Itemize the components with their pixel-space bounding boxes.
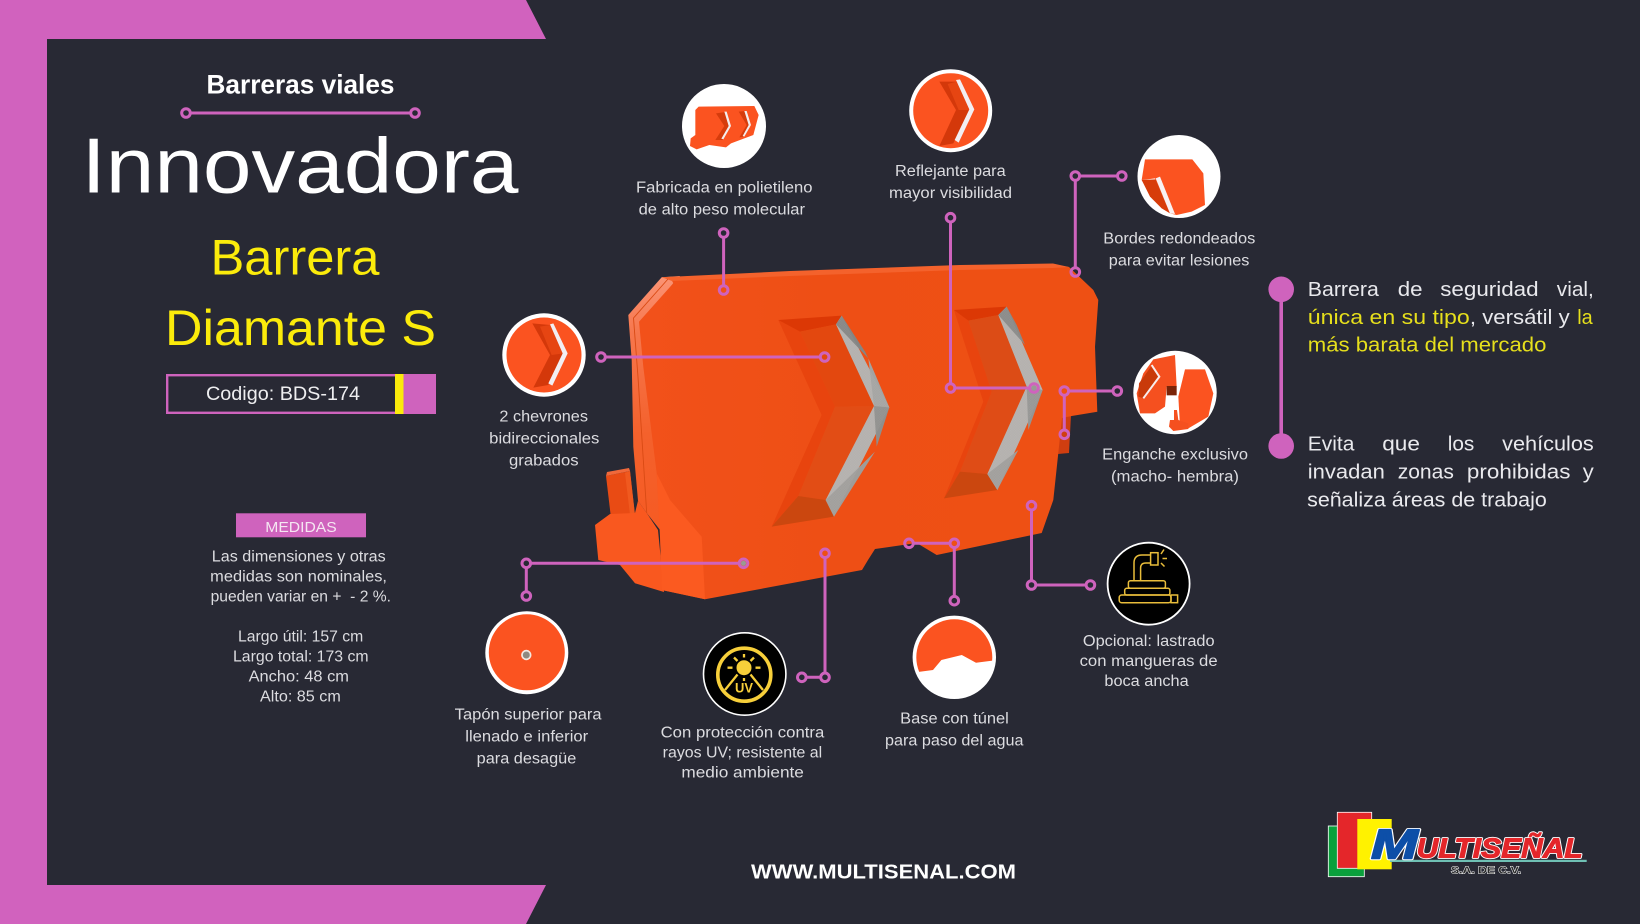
label: con mangueras de bbox=[1080, 653, 1218, 670]
rear hook bbox=[1058, 415, 1071, 454]
label bbox=[889, 163, 1012, 202]
connector bbox=[597, 353, 829, 361]
medidas text bbox=[210, 549, 391, 706]
label: 2 chevrones bbox=[499, 408, 588, 425]
connector bbox=[1071, 172, 1126, 276]
medidas text: Ancho: 48 cm bbox=[249, 669, 349, 686]
label: Bordes redondeados bbox=[1103, 230, 1256, 247]
product code box bbox=[167, 374, 436, 414]
label: Reflejante para bbox=[895, 163, 1006, 180]
callout: 2 chevrones bbox=[489, 313, 829, 469]
icon: male-female coupling bbox=[1133, 351, 1217, 434]
product: orange road barrier bbox=[595, 264, 1098, 599]
callout: enganche bbox=[1060, 351, 1248, 485]
timeline bbox=[1268, 276, 1294, 459]
medidas badge: MEDIDAS bbox=[265, 519, 337, 536]
callout: tapon bbox=[455, 559, 748, 767]
product code box: Codigo: BDS-174 bbox=[206, 383, 360, 405]
icon: base tunnel bbox=[912, 616, 996, 699]
connector bbox=[522, 559, 748, 600]
chevron one bbox=[772, 316, 889, 527]
text: key point two: zonas bbox=[1398, 461, 1454, 484]
connector bbox=[798, 549, 829, 682]
label: Enganche exclusivo bbox=[1102, 446, 1248, 463]
panel: title block bbox=[82, 69, 519, 414]
icon: rounded edge bbox=[1138, 135, 1220, 218]
chevron two bbox=[944, 307, 1043, 498]
panel: medidas bbox=[210, 513, 391, 706]
connector bbox=[946, 213, 1038, 392]
label bbox=[661, 724, 825, 781]
label bbox=[455, 706, 602, 767]
medidas text: medidas son nominales, bbox=[210, 569, 387, 586]
text: key point one: Barrera bbox=[1308, 278, 1379, 301]
label: Tapón superior para bbox=[455, 706, 602, 723]
connector bbox=[1027, 501, 1095, 589]
callout: polietileno bbox=[636, 84, 812, 294]
text: key point two: señaliza áreas de trabajo bbox=[1307, 489, 1547, 512]
pink frame bbox=[0, 0, 546, 924]
text: key point two: invadan bbox=[1308, 461, 1385, 484]
label: Opcional: lastrado bbox=[1083, 633, 1215, 650]
logo: Multiseñal: M bbox=[1371, 820, 1419, 867]
callout: proteccion UV bbox=[661, 549, 829, 781]
medidas text: pueden variar en + - 2 %. bbox=[211, 589, 391, 606]
label: grabados bbox=[509, 452, 579, 469]
label: para evitar lesiones bbox=[1109, 252, 1250, 269]
medidas text: Largo total: 173 cm bbox=[233, 649, 369, 666]
subtitle: Barrera: Barrera bbox=[210, 230, 380, 286]
label: boca ancha bbox=[1104, 673, 1189, 690]
text: key point two: y bbox=[1583, 461, 1595, 484]
filling tube bbox=[606, 468, 635, 518]
connector bbox=[719, 229, 728, 294]
decorative connector under heading bbox=[182, 109, 419, 117]
label: medio ambiente bbox=[681, 764, 804, 781]
logo: Multiseñal: S.A. DE C.V. bbox=[1451, 864, 1521, 876]
icon: cap bbox=[485, 611, 568, 694]
callout: base con tunel bbox=[885, 539, 1024, 749]
text: key point two: prohibidas bbox=[1467, 461, 1570, 484]
label bbox=[1102, 446, 1248, 485]
connector bbox=[1060, 387, 1122, 439]
heading: Barreras viales: Barreras viales bbox=[206, 69, 394, 99]
lighter lower corner bbox=[657, 473, 705, 599]
icon: UV sun: UV bbox=[735, 681, 753, 696]
label: llenado e inferior bbox=[465, 728, 588, 745]
label: Base con túnel bbox=[900, 710, 1009, 727]
callout: lastrado bbox=[1027, 501, 1218, 690]
text: key point one: la bbox=[1577, 306, 1593, 329]
label: para desagüe bbox=[477, 750, 576, 767]
text: key point two: que bbox=[1382, 433, 1420, 456]
title: Innovadora: Innovadora bbox=[82, 122, 519, 210]
text: key point two: vehículos bbox=[1502, 433, 1594, 456]
text: key point one: más barata del mercado bbox=[1308, 334, 1546, 357]
text: key point two bbox=[1307, 433, 1595, 512]
base block bbox=[595, 501, 664, 592]
medidas badge bbox=[236, 513, 366, 537]
logo: Multiseñal bbox=[1328, 812, 1587, 877]
text: key point two: Evita bbox=[1308, 433, 1355, 456]
text: key point one: vial, bbox=[1557, 278, 1594, 301]
logo: Multiseñal: ULTISEÑAL bbox=[1417, 832, 1583, 863]
label: rayos UV; resistente al bbox=[663, 744, 822, 761]
icon: mini barrier bbox=[682, 84, 766, 168]
label: Con protección contra bbox=[661, 724, 825, 741]
label: bidireccionales bbox=[489, 430, 600, 447]
label bbox=[1103, 230, 1256, 269]
main body bbox=[639, 265, 1098, 599]
text: key point one bbox=[1308, 278, 1594, 357]
text: key point one: única en su tipo bbox=[1308, 306, 1470, 329]
label: Fabricada en polietileno bbox=[636, 180, 812, 197]
subtitle: Diamante S: Diamante S bbox=[165, 300, 436, 356]
icon: hose bbox=[1108, 543, 1190, 625]
label bbox=[489, 408, 600, 469]
connector bbox=[905, 539, 959, 605]
text: key point one: de bbox=[1398, 278, 1423, 301]
label bbox=[636, 180, 812, 219]
label: de alto peso molecular bbox=[639, 202, 805, 219]
text: key point one: , versátil y bbox=[1470, 306, 1570, 329]
icon: UV sun bbox=[704, 633, 786, 715]
text: key point one: seguridad bbox=[1440, 278, 1539, 301]
label bbox=[1080, 633, 1218, 690]
top edge highlight bbox=[662, 264, 1069, 281]
label bbox=[885, 710, 1024, 749]
label: mayor visibilidad bbox=[889, 185, 1012, 202]
label: para paso del agua bbox=[885, 732, 1024, 749]
callout: bordes redondeados bbox=[1071, 135, 1256, 276]
icon: chevron close-up bbox=[909, 69, 992, 152]
side strip bbox=[628, 276, 680, 540]
icon: chevron bbox=[502, 313, 586, 397]
medidas text: Largo útil: 157 cm bbox=[238, 629, 363, 646]
medidas text: Alto: 85 cm bbox=[260, 689, 341, 706]
strip crease bbox=[634, 279, 668, 513]
panel: key points bbox=[1268, 276, 1595, 512]
label: (macho- hembra) bbox=[1111, 468, 1239, 485]
text: key point two: los bbox=[1448, 433, 1474, 456]
logo: Multiseñal: ULTISEÑAL bbox=[1417, 832, 1583, 863]
website url: WWW.MULTISENAL.COM bbox=[751, 862, 1016, 884]
logo: Multiseñal: M bbox=[1371, 820, 1419, 867]
callout: reflejante bbox=[889, 69, 1038, 392]
medidas text: Las dimensiones y otras bbox=[212, 549, 386, 566]
